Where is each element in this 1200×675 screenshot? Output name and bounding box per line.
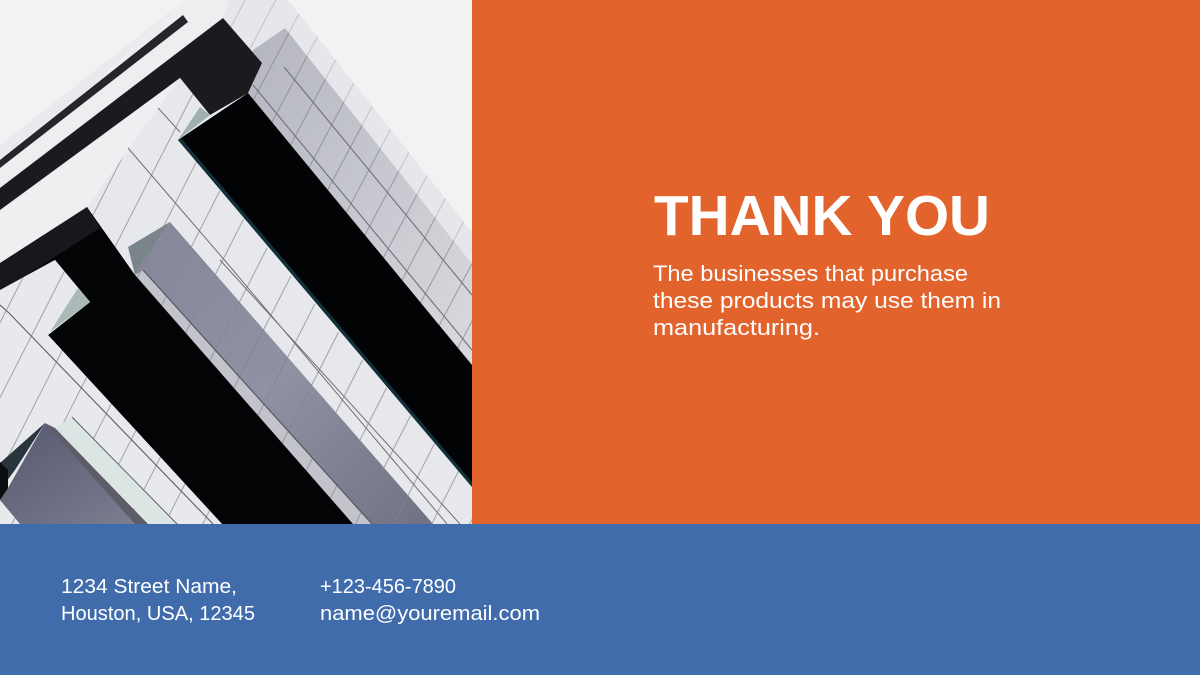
address: Houston, USA, 12345	[61, 603, 255, 625]
body text: manufacturing.	[653, 315, 820, 340]
body text	[653, 261, 1001, 340]
heading: thank you: THANK YOU	[654, 184, 990, 248]
address: 1234 Street Name,	[61, 576, 237, 598]
contact band	[0, 524, 1200, 675]
address	[61, 576, 255, 625]
phone and email: name@youremail.com	[320, 603, 540, 625]
phone and email	[320, 576, 540, 625]
body text: these products may use them in	[653, 288, 1001, 313]
body text: The businesses that purchase	[653, 261, 968, 286]
phone and email: +123-456-7890	[320, 576, 456, 598]
orange panel	[472, 0, 1200, 524]
building photograph	[0, 0, 472, 524]
